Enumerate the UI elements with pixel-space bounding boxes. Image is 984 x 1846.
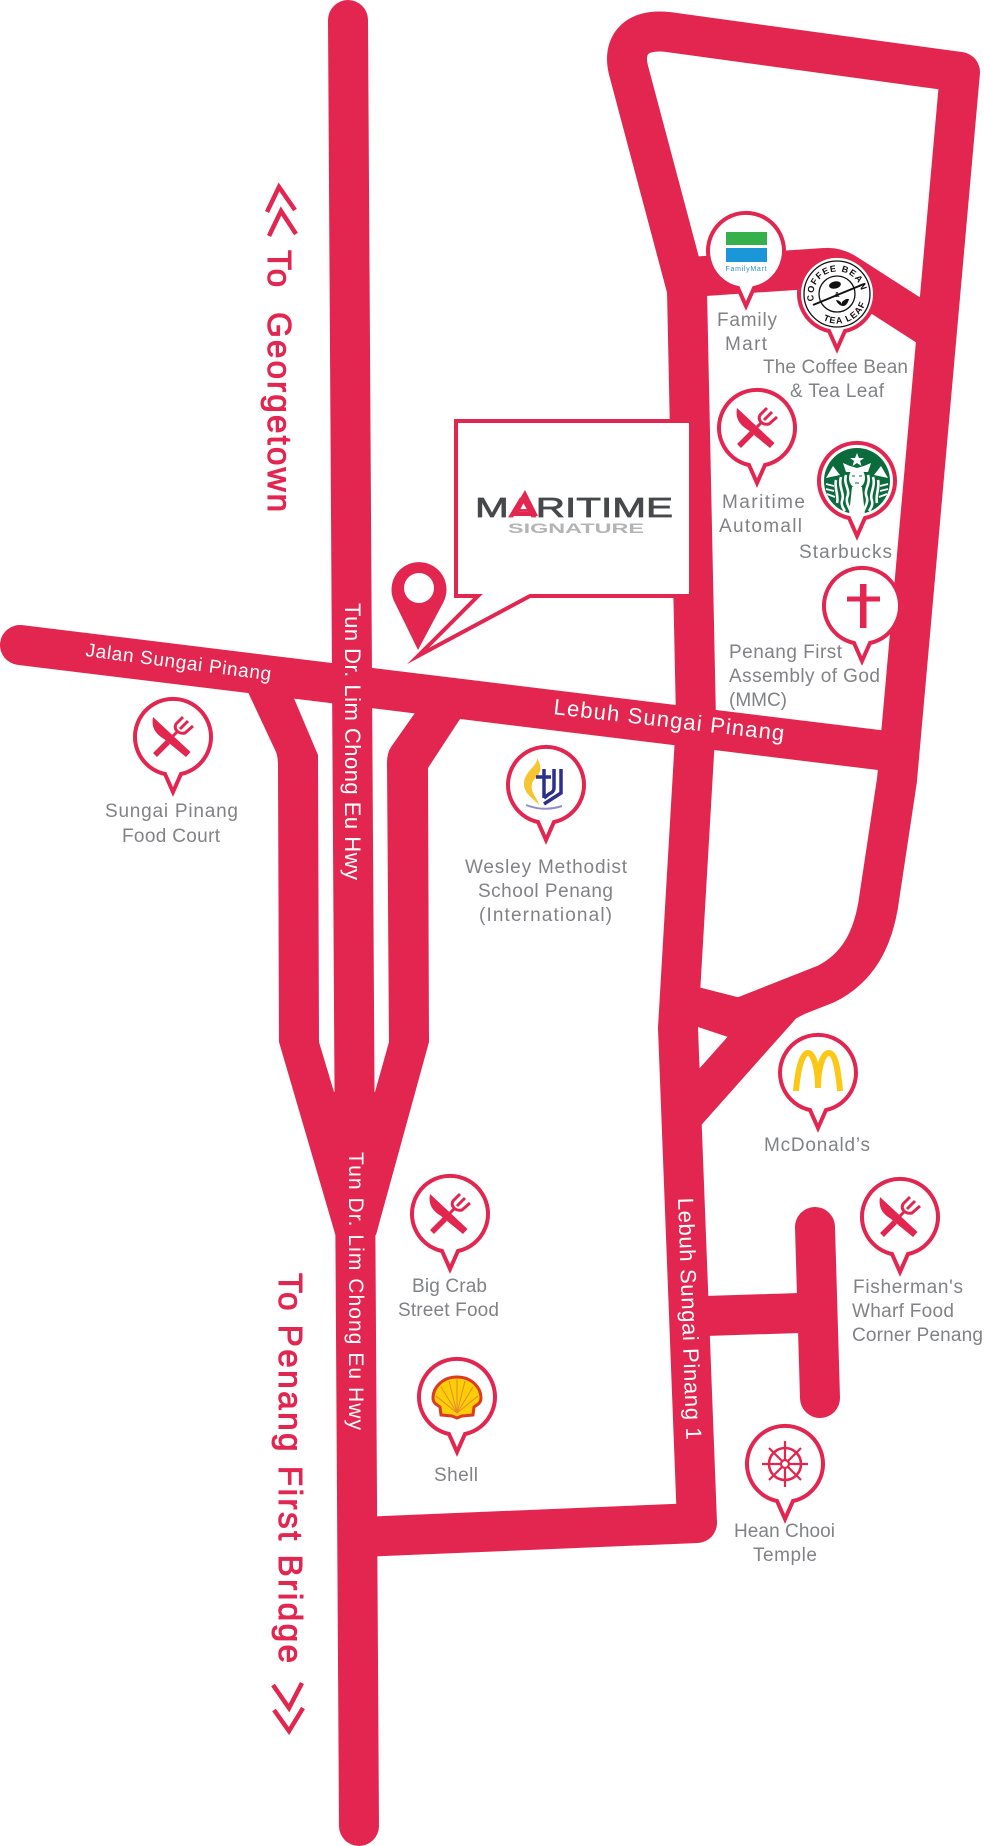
label: Hean Chooi Temple: Hean Chooi xyxy=(734,1521,835,1542)
label: The Coffee Bean & Tea Leaf: The Coffee Bean xyxy=(763,357,908,378)
label: Big Crab Street Food: Street Food xyxy=(398,1300,499,1321)
road: diagonal link xyxy=(685,1005,782,1114)
logo: motto arc xyxy=(526,805,562,809)
road: coffee bean connector xyxy=(690,268,940,334)
logo: leaf xyxy=(836,299,849,306)
logo: inner ring xyxy=(819,276,855,312)
logo: siren hair xyxy=(836,475,878,512)
direction text: To Penang First Bridge: To Penang First Bridge xyxy=(272,1273,309,1663)
pin body xyxy=(824,568,900,661)
label: Fisherman's Wharf Food Corner Penang xyxy=(852,1277,983,1346)
icon: location marker xyxy=(391,562,447,650)
road label: Jalan Sungai Pinang: Jalan Sungai Pinang xyxy=(84,640,272,685)
logo: flame xyxy=(524,758,540,805)
pin: Starbucks xyxy=(819,443,895,536)
icon: ship wheel xyxy=(762,1441,808,1487)
pin: Wesley Methodist School xyxy=(508,747,584,840)
label: Penang First Assembly of God xyxy=(729,642,880,711)
icon: fork xyxy=(432,1194,470,1232)
callout bubble xyxy=(418,421,691,656)
road: side bar xyxy=(815,1227,820,1398)
logo: ampersand: & xyxy=(834,292,840,299)
label: Sungai Pinang Food Court: Sungai Pinang xyxy=(105,801,238,822)
pin body xyxy=(780,1035,856,1128)
label: Big Crab Street Food: Big Crab xyxy=(412,1276,487,1297)
label: Starbucks: Starbucks xyxy=(799,542,892,563)
logo triangle xyxy=(510,490,538,516)
logo: shell ribs xyxy=(436,1379,478,1413)
pin: Fisherman's Wharf xyxy=(862,1179,938,1272)
logo: slash xyxy=(813,284,864,305)
label: Family Mart xyxy=(717,310,778,355)
pin: Family Mart xyxy=(708,213,784,306)
logo: arc text bottom: TEA LEAF xyxy=(824,302,864,324)
label: Fisherman's Wharf Food Corner Penang: Fisherman's xyxy=(853,1277,963,1298)
logo: outer ring xyxy=(804,261,870,327)
label: The Coffee Bean & Tea Leaf: & Tea Leaf xyxy=(790,381,885,402)
label: McDonald's: McDonald’s xyxy=(764,1135,870,1156)
label: The Coffee Bean & Tea Leaf xyxy=(763,357,908,402)
icon: cross xyxy=(847,584,880,628)
logo: FamilyMart blue band xyxy=(726,248,767,262)
label: Sungai Pinang Food Court: Food Court xyxy=(122,826,221,847)
logo: arc text top: COFFEE BEAN xyxy=(807,265,867,301)
pin body xyxy=(819,443,895,536)
pin: Hean Chooi Temple xyxy=(747,1426,823,1519)
pin: McDonald's xyxy=(780,1035,856,1128)
label: Wesley Methodist School Penang: (International) xyxy=(479,905,612,926)
road: Jalan and Lebuh Sungai Pinang xyxy=(20,645,895,752)
logo: crown xyxy=(843,463,871,472)
road label: Lebuh Sungai Pinang: Lebuh Sungai Pinang xyxy=(552,694,786,746)
pin body xyxy=(719,390,795,483)
label: Fisherman's Wharf Food Corner Penang: Wharf Food xyxy=(852,1301,954,1322)
road: side stem xyxy=(705,1313,800,1316)
logo: green disc xyxy=(824,448,890,514)
icon: fork xyxy=(155,717,193,755)
icon: fork xyxy=(739,408,777,446)
logo: torso xyxy=(849,487,865,515)
direction text: To Georgetown: To Georgetown xyxy=(261,250,298,512)
direction arrow: to Georgetown xyxy=(267,187,296,236)
road label: highway lower: Tun Dr. Lim Chong Eu Hwy xyxy=(344,1152,367,1430)
road: junction link xyxy=(698,964,845,1037)
road: highway side branches xyxy=(247,690,462,1237)
logo: bean xyxy=(828,280,842,290)
callout: Maritime Signature xyxy=(418,421,691,656)
logo: star xyxy=(850,453,864,466)
label: Penang First Assembly of God: (MMC) xyxy=(729,690,787,711)
label: Wesley Methodist School Penang xyxy=(465,857,628,926)
label: Maritime Automall: Maritime xyxy=(722,492,805,513)
logo: siren face xyxy=(849,468,865,488)
icon: knife xyxy=(430,1194,468,1234)
direction arrow: to Penang First Bridge xyxy=(273,1683,303,1731)
pin body xyxy=(799,256,875,349)
logo: golden arches xyxy=(796,1053,840,1091)
pin body xyxy=(419,1359,495,1452)
label: Hean Chooi Temple: Temple xyxy=(753,1545,817,1566)
pin body xyxy=(747,1426,823,1519)
label: Wesley Methodist School Penang: School Penang xyxy=(478,881,613,902)
logo: facial details xyxy=(852,476,862,483)
label: Penang First Assembly of God: Penang First xyxy=(729,642,843,663)
logo: cross and book xyxy=(536,769,561,804)
road: Tun Dr. Lim Chong Eu Hwy xyxy=(348,20,359,1826)
label: Maritime Automall: Automall xyxy=(719,516,802,537)
logo: shell xyxy=(433,1377,481,1418)
road: Lebuh Sungai Pinang 1 and northern loop xyxy=(360,31,960,1537)
label: Wesley Methodist School Penang: Wesley Methodist xyxy=(465,857,628,878)
label: Maritime Automall xyxy=(719,492,805,537)
logo: FamilyMart green band xyxy=(726,232,767,245)
pin body xyxy=(708,213,784,306)
pin body xyxy=(508,747,584,840)
logo: FamilyMart wordmark: FamilyMart xyxy=(726,266,767,273)
label: Fisherman's Wharf Food Corner Penang: Corner Penang xyxy=(852,1325,983,1346)
road label: Lebuh Sungai Pinang 1: Lebuh Sungai Pinang 1 xyxy=(673,1197,706,1440)
logo subtitle: SIGNATURE xyxy=(508,520,644,536)
label: Shell: Shell xyxy=(434,1465,478,1486)
pin body xyxy=(862,1179,938,1272)
road label: highway upper: Tun Dr. Lim Chong Eu Hwy xyxy=(340,603,365,880)
label: Hean Chooi Temple xyxy=(734,1521,835,1566)
pin: Sungai Pinang Food Court xyxy=(135,699,211,792)
logo: side stars xyxy=(826,466,888,478)
label: Family Mart: Mart xyxy=(725,334,768,355)
icon: fork xyxy=(882,1197,920,1235)
logo wordmark: M A RITIME xyxy=(475,492,673,523)
label: Big Crab Street Food xyxy=(398,1276,499,1321)
label: Sungai Pinang Food Court xyxy=(105,801,238,847)
pin: Penang First Assembly of God xyxy=(824,568,900,661)
icon: knife xyxy=(737,408,774,448)
pin body xyxy=(412,1176,488,1269)
label: Family Mart: Family xyxy=(717,310,778,331)
icon: knife xyxy=(153,717,190,757)
pin: Big Crab Street Food xyxy=(412,1176,488,1269)
label: Penang First Assembly of God: Assembly of God xyxy=(729,666,880,687)
pin: Shell xyxy=(419,1359,495,1452)
logo: side tails xyxy=(826,484,888,497)
pin: Maritime Automall xyxy=(719,390,795,483)
pin: The Coffee Bean xyxy=(797,258,873,354)
pin body xyxy=(135,699,211,792)
icon: knife xyxy=(880,1197,918,1237)
